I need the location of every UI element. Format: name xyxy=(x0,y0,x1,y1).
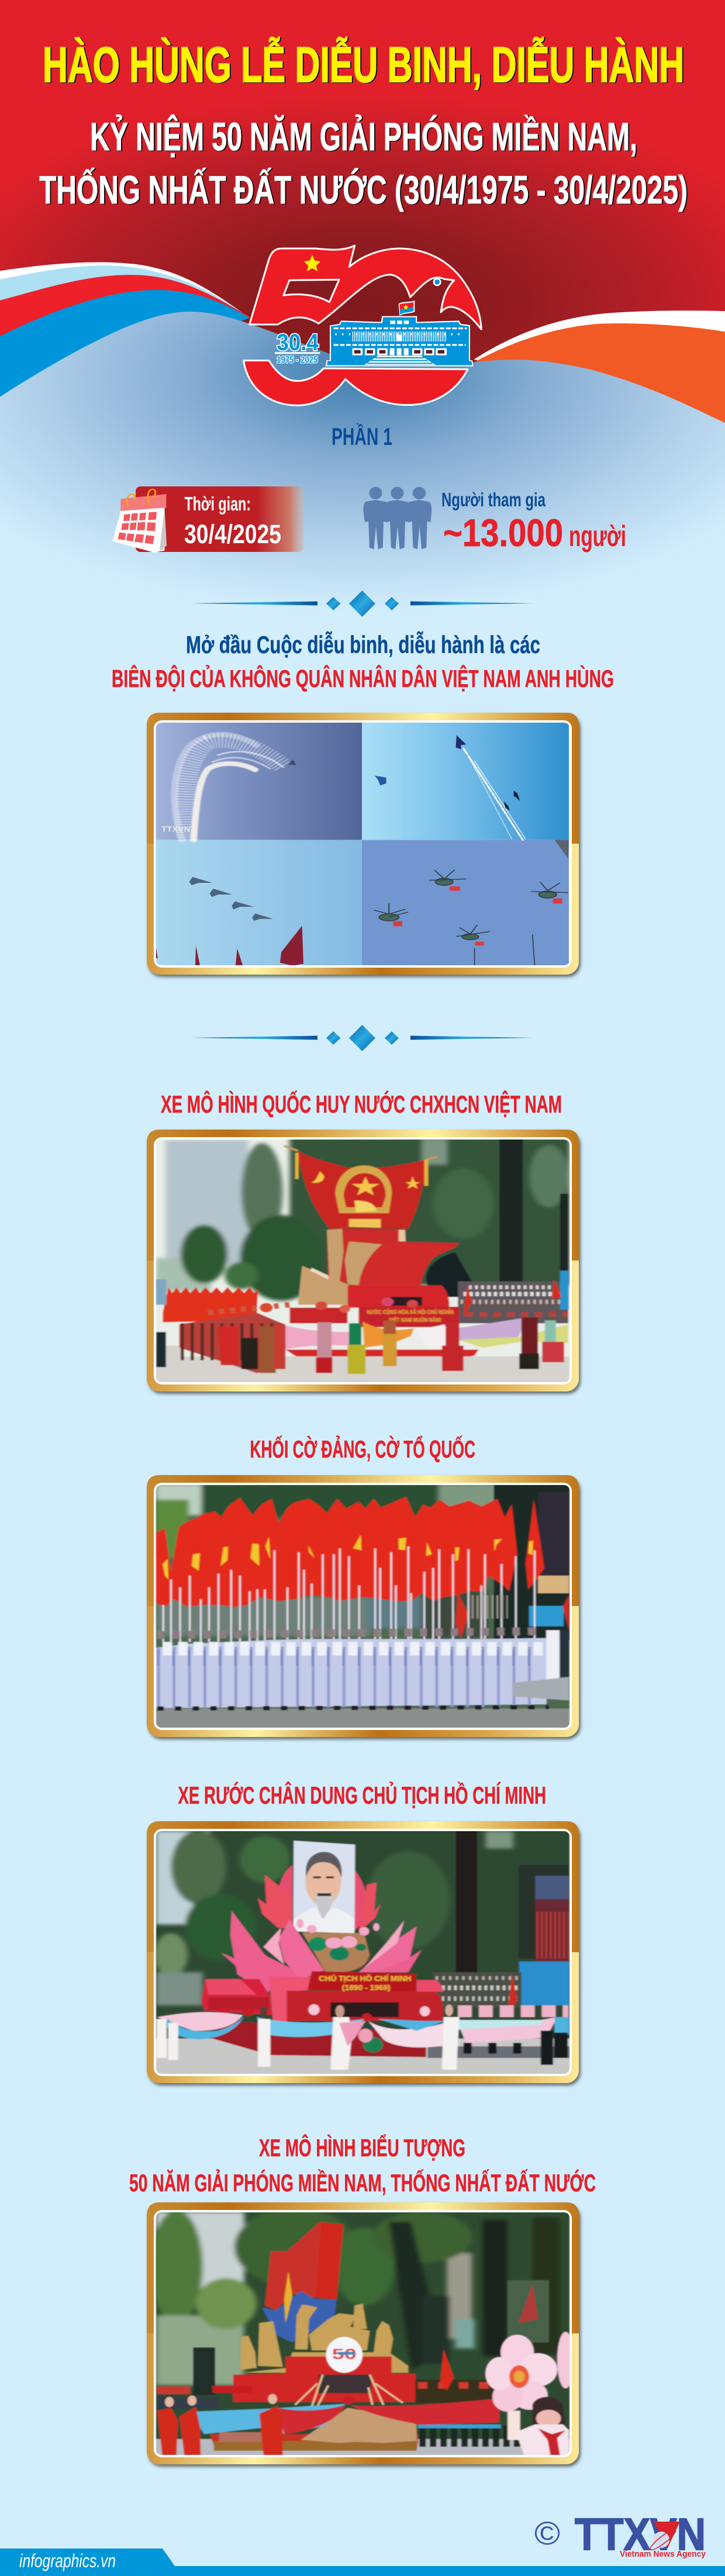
book float: VIỆT NAM MUÔN NĂM! xyxy=(389,1316,441,1323)
logo: TTXVN: Vietnam News Agency xyxy=(620,2549,706,2559)
website: infographics.vn xyxy=(19,2550,116,2571)
header background with waves xyxy=(0,0,725,636)
divider 2 xyxy=(191,1025,533,1051)
portrait xyxy=(294,1841,355,1933)
red petals behind portrait xyxy=(278,1865,292,1928)
heading: flag block: KHỐI CỜ ĐẢNG, CỜ TỔ QUỐC xyxy=(250,1434,475,1463)
pedestrian row xyxy=(458,1994,568,2029)
lotus xyxy=(221,1911,422,1994)
stars xyxy=(163,1535,533,1580)
flags at ground xyxy=(156,926,303,966)
dancers xyxy=(157,2004,460,2070)
book float xyxy=(285,1229,479,1362)
icon: calendar xyxy=(112,489,167,553)
logo: TTXVN: TTXVN xyxy=(575,2509,706,2560)
crowd xyxy=(458,1282,568,1323)
people xyxy=(156,1297,564,1374)
sashes xyxy=(157,2012,243,2031)
heading: liberation symbol float xyxy=(129,2133,596,2197)
logo date xyxy=(275,330,320,365)
ladies in red xyxy=(157,2406,283,2455)
cloths xyxy=(281,1324,350,1349)
soldiers xyxy=(156,1630,569,1728)
heading: liberation symbol float: XE MÔ HÌNH BIỂU TƯỢNG xyxy=(259,2133,465,2161)
float podium xyxy=(233,2357,416,2402)
date badge xyxy=(112,486,303,553)
crowd xyxy=(472,1572,508,1642)
scroll xyxy=(302,1932,370,1972)
soldiers xyxy=(419,2404,522,2468)
photo frame 3: flag block xyxy=(147,1475,579,1737)
photo frame 4: Ho Chi Minh portrait float xyxy=(147,1821,579,2083)
photo frame 4: Ho Chi Minh portrait float: (1890 - 1969) xyxy=(342,1984,391,1992)
participants: người xyxy=(569,520,626,553)
helicopters xyxy=(374,870,568,945)
emblem flag xyxy=(284,1146,437,1229)
heading: air force opening: Mở đầu Cuộc diễu binh, diễu hành là các xyxy=(186,630,540,658)
poles xyxy=(163,1546,534,1642)
part label: PHẦN 1 xyxy=(332,423,392,450)
photo frame 5: liberation symbol float: 50 xyxy=(332,2346,357,2363)
participants: ~13.000 xyxy=(443,511,563,554)
photo frame 1: air force xyxy=(147,713,579,975)
logo date: 1975 - 2025 xyxy=(277,355,318,365)
small flag xyxy=(399,301,415,316)
logo date: 30.4 xyxy=(277,330,319,355)
date badge: 30/4/2025 xyxy=(184,519,281,549)
subtitle xyxy=(39,114,688,212)
red flag rows xyxy=(163,1287,258,1322)
photo frame 4: Ho Chi Minh portrait float: CHỦ TỊCH HỒ CHÍ MINH xyxy=(319,1974,411,1983)
date badge: Thời gian: xyxy=(185,493,251,514)
building xyxy=(326,316,473,367)
road xyxy=(156,2439,569,2456)
road xyxy=(156,1356,569,1384)
book float: NƯỚC CỘNG HÒA XÃ HỘI CHỦ NGHĨA xyxy=(367,1308,454,1315)
road xyxy=(156,2039,569,2076)
crowd with flags xyxy=(415,2380,498,2403)
icon: people xyxy=(363,487,431,549)
photo frame 2: national emblem float xyxy=(147,1130,579,1391)
flags xyxy=(156,1497,517,1607)
footer bar xyxy=(0,2549,725,2576)
gold statues xyxy=(240,2304,408,2373)
stands xyxy=(433,1972,522,2007)
flag sculpture xyxy=(262,2222,343,2343)
heading: air force opening xyxy=(112,630,614,692)
logo: TTXVN xyxy=(534,2509,706,2560)
participants xyxy=(363,487,626,554)
participants: Người tham gia xyxy=(441,489,546,510)
heading: Ho Chi Minh portrait float: XE RƯỚC CHÂN DUNG CHỦ TỊCH HỒ CHÍ MINH xyxy=(178,1781,546,1809)
photo frame 5: liberation symbol float xyxy=(147,2202,579,2464)
logo: 50 years xyxy=(244,246,481,405)
divider 1 xyxy=(191,591,533,617)
flower and girl xyxy=(485,2332,574,2456)
fringe skirt xyxy=(210,2434,418,2451)
cloth xyxy=(191,2404,345,2434)
photo frame 1: air force: TTXVN xyxy=(161,826,191,834)
jets xyxy=(189,877,273,921)
logo: TTXVN: © xyxy=(534,2515,560,2551)
float body xyxy=(201,1979,272,2015)
flares xyxy=(175,734,284,840)
